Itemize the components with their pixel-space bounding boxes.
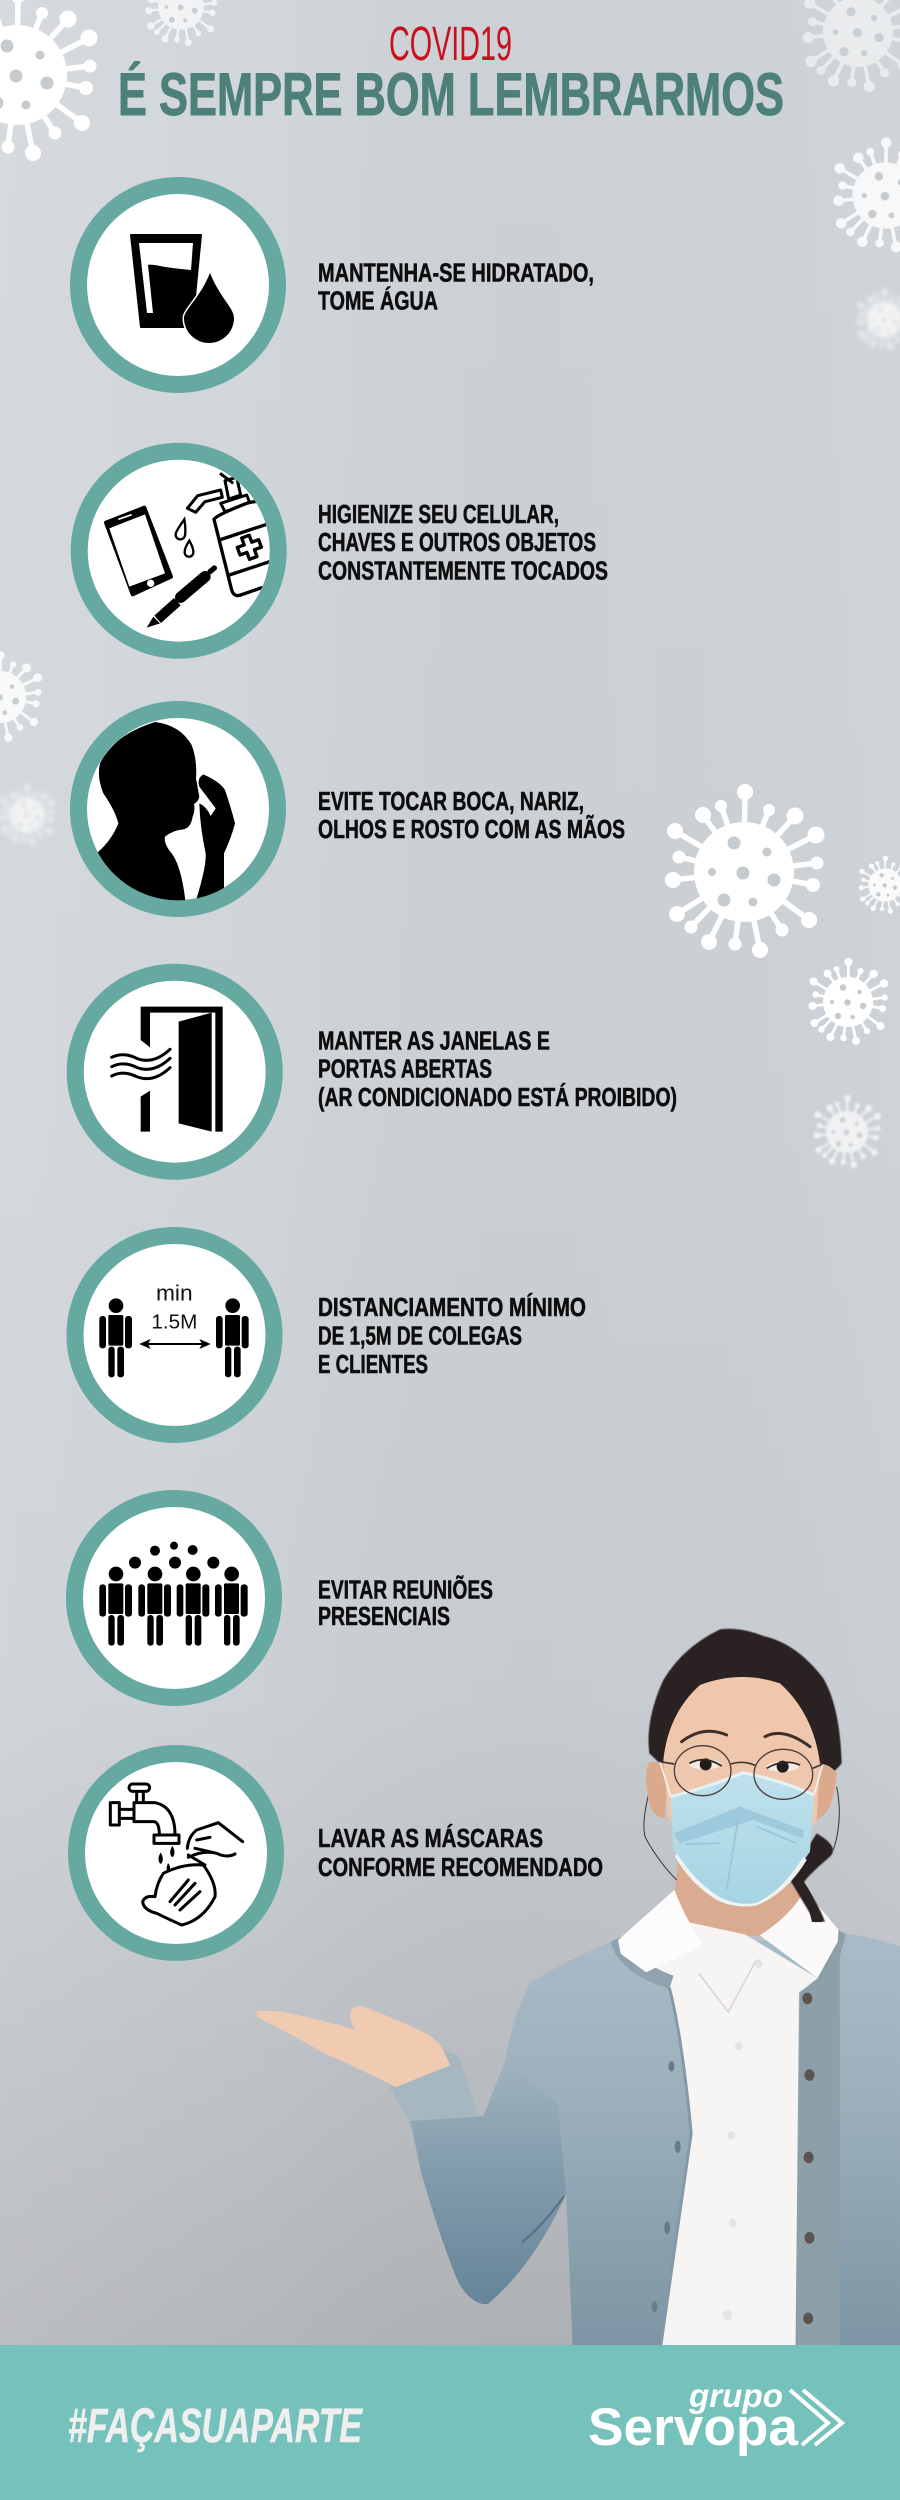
text: sanitize objects: CONSTANTEMENTE TOCADOS <box>318 556 608 586</box>
woman: hair tail behind the collar <box>796 1877 822 1922</box>
text: avoid touching face: EVITE TOCAR BOCA, NARIZ, <box>318 786 584 816</box>
icon: tap, hand and mask <box>110 1784 243 1925</box>
virus: right upper <box>833 137 900 252</box>
icon ring <box>78 710 278 908</box>
virus: main right <box>665 784 824 958</box>
panel: distancing <box>75 1236 586 1434</box>
logo: Grupo Servopa: Servopa <box>588 2398 799 2457</box>
panel: avoid touching face <box>78 710 625 908</box>
icon: two people 1.5 m apart <box>99 1281 249 1377</box>
icon: open door and air <box>112 1007 223 1132</box>
logo: Grupo Servopa: grupo <box>688 2377 783 2414</box>
text: open windows: MANTER AS JANELAS E <box>318 1026 550 1056</box>
woman: head with glasses and mask <box>644 1629 842 1922</box>
virus: left <box>0 651 42 742</box>
text: avoid meetings <box>318 1574 493 1631</box>
panel: hydration <box>78 186 594 384</box>
text: open windows: (AR CONDICIONADO ESTÁ PROIBIDO) <box>318 1082 677 1112</box>
virus: top centre-left <box>145 0 218 46</box>
text: sanitize objects: HIGIENIZE SEU CELULAR, <box>318 499 559 529</box>
icon ring <box>74 1498 274 1698</box>
panel: wash masks <box>76 1754 603 1952</box>
text: hydration: TOME ÁGUA <box>318 286 438 316</box>
icon ring <box>78 186 278 384</box>
virus: right blurred <box>857 289 900 350</box>
virus: top left <box>0 0 98 161</box>
footer band <box>0 2345 900 2500</box>
icon: phone, pen and sanitizer <box>104 472 270 628</box>
text: distancing: E CLIENTES <box>318 1349 428 1379</box>
text: avoid meetings: EVITAR REUNIÕES <box>318 1574 493 1604</box>
illustration: woman with mask, open hand <box>257 1629 900 2345</box>
woman: body and arm <box>257 1862 900 2345</box>
text: distancing: DISTANCIAMENTO MÍNIMO <box>318 1292 586 1322</box>
icon: face silhouette and hand <box>98 722 235 900</box>
text: wash masks: CONFORME RECOMENDADO <box>318 1852 603 1882</box>
title: COVID19: COVID19 <box>389 18 512 71</box>
hashtag: #FAÇASUAPARTE <box>68 2400 363 2453</box>
icon ring <box>75 1236 274 1434</box>
panel: open windows <box>75 972 677 1171</box>
icon: glass and water drop <box>131 235 234 343</box>
text: sanitize objects: CHAVES E OUTROS OBJETOS <box>318 527 596 557</box>
text: distancing <box>318 1292 586 1379</box>
text: avoid touching face <box>318 786 625 844</box>
virus: left blurred <box>0 785 55 845</box>
icon ring <box>75 972 274 1171</box>
logo: Grupo Servopa <box>588 2377 842 2457</box>
text: sanitize objects <box>318 499 608 586</box>
icon: two people 1.5 m apart: min <box>156 1281 193 1306</box>
text: hydration <box>318 258 594 316</box>
virus: top right <box>803 0 900 92</box>
virus: right medium <box>808 958 888 1045</box>
virus: right lower blurred <box>814 1095 881 1168</box>
icon ring <box>76 1754 276 1952</box>
icon: group of people with droplets <box>99 1542 248 1646</box>
text: hydration: MANTENHA-SE HIDRATADO, <box>318 258 594 288</box>
decorative viruses <box>0 0 900 1168</box>
text: distancing: DE 1,5M DE COLEGAS <box>318 1320 522 1350</box>
icon ring <box>79 451 278 650</box>
text: wash masks: LAVAR AS MÁSCARAS <box>318 1823 543 1853</box>
text: open windows <box>318 1026 677 1112</box>
text: avoid meetings: PRESENCIAIS <box>318 1601 450 1631</box>
virus: far right small <box>859 856 900 914</box>
text: open windows: PORTAS ABERTAS <box>318 1054 492 1084</box>
panel: sanitize objects <box>79 451 608 650</box>
panel: avoid meetings <box>74 1498 493 1698</box>
text: wash masks <box>318 1823 603 1882</box>
text: avoid touching face: OLHOS E ROSTO COM AS MÃOS <box>318 814 625 844</box>
icon: two people 1.5 m apart: 1.5M <box>151 1311 197 1334</box>
